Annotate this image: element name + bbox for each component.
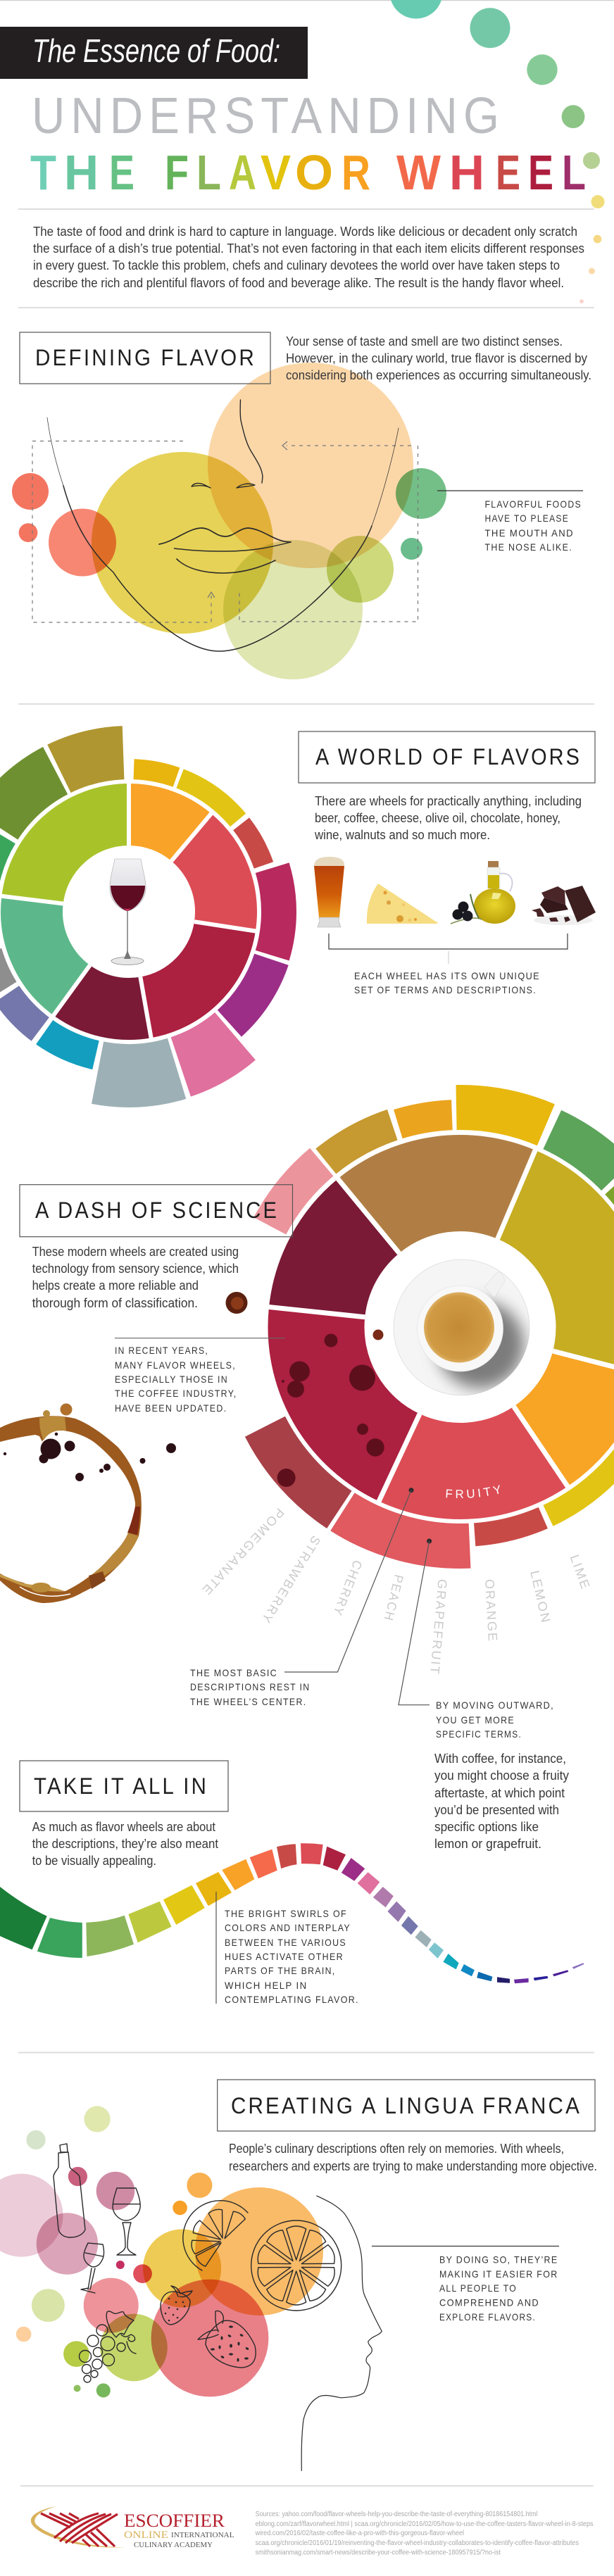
callout: bright swirls: BETWEEN THE VARIOUS [225,1937,346,1948]
callout line: center [284,1488,414,1672]
callout: bright swirls: HUES ACTIVATE OTHER [225,1951,344,1962]
logo name: ESCOFFIER [124,2511,225,2531]
callout: most basic: DESCRIPTIONS REST IN [190,1681,310,1692]
heading: take it all in: TAKE IT ALL IN [34,1773,208,1799]
sources [255,2511,594,2557]
text: wheels for anything: There are wheels for practically anything, including [315,794,582,808]
outer wheel labels: STRAWBERRY [258,1533,323,1626]
icon: beer [314,857,344,927]
callout: most basic: THE MOST BASIC [190,1667,277,1678]
text: modern wheels: These modern wheels are created using [32,1245,239,1259]
logo subtitle international: INTERNATIONAL [171,2531,234,2539]
callout: recent years: HAVE BEEN UPDATED. [115,1402,227,1414]
icon: chocolate [532,886,596,925]
outer wheel labels: CHERRY [330,1558,365,1619]
text: memories [229,2142,597,2173]
callout: flavorful foods: THE MOUTH AND [484,527,574,539]
callout: by doing so: ALL PEOPLE TO [439,2282,517,2294]
text: with coffee: specific options like [434,1820,539,1834]
callout: bright swirls: COLORS AND INTERPLAY [225,1922,351,1933]
logo subtitle online: ONLINE [124,2530,168,2541]
bracket connecting foods [329,934,568,964]
title: the flavor wheel: E [496,145,520,200]
intro text: in every guest. To tackle this problem, chefs and culinary devotees the world over have taken steps to [33,258,560,272]
icon: wine bottle [54,2144,85,2237]
heading: a world of flavors [299,731,595,783]
text: visually appealing: the descriptions, they’re also meant [32,1837,218,1851]
coffee flavor wheel [152,1019,614,1635]
heading: a dash of science: A DASH OF SCIENCE [35,1198,279,1223]
coffee splashes on wheel [277,1329,384,1487]
callout: moving outward: SPECIFIC TERMS. [436,1728,522,1740]
intro text: describe the rich and plentiful flavors of food and beverage alike. The result is the handy flavor wheel. [33,276,564,290]
logo emblem [31,2506,125,2547]
callout: bright swirls: PARTS OF THE BRAIN, [225,1965,335,1976]
text: with coffee: you might choose a fruity [434,1768,569,1783]
head profile [301,2196,382,2471]
outer wheel labels: POMEGRANATE [199,1505,287,1598]
text: modern wheels: helps create a more reliable and [32,1278,199,1293]
icon: orange slice [251,2220,342,2311]
title: the flavor wheel: T [30,145,56,200]
outer wheel labels: GRAPEFRUIT [427,1578,449,1676]
outer wheel labels: PEACH [381,1573,406,1623]
text: with coffee [434,1752,569,1851]
icon: wine glass large [113,2188,140,2255]
outer wheel labels: ORANGE [482,1578,500,1642]
callout: most basic [190,1667,310,1707]
callout: recent years: IN RECENT YEARS, [115,1345,208,1356]
icon: olive oil [451,861,515,924]
sources: wired.com/2016/02/taste-coffee-like-a-pro-with-this-gorgeous-flavor-wheel [255,2530,464,2537]
decorative dots trail [390,0,604,303]
text: with coffee: aftertaste, at which point [434,1786,565,1800]
callout: moving outward [436,1699,554,1740]
dashed flow arrows [32,441,418,622]
title: the flavor wheel: O [295,145,333,200]
title: the flavor wheel: E [109,145,134,200]
coffee drop by text [225,1292,248,1314]
callout: recent years: ESPECIALLY THOSE IN [115,1374,228,1385]
color wave ribbon [0,1843,584,1983]
title banner [0,27,308,79]
callout: bright swirls: CONTEMPLATING FLAVOR. [225,1994,359,2005]
panel: take it all in [0,1761,584,2005]
callout: each wheel [354,970,540,995]
coffee ring stain [0,1404,176,1603]
callout line: outward [399,1539,432,1705]
title: the flavor wheel: R [342,145,370,200]
heading: lingua franca: CREATING A LINGUA FRANCA [231,2093,582,2118]
logo subtitle academy: CULINARY ACADEMY [134,2541,213,2549]
heading: a dash of science [20,1185,293,1237]
text: modern wheels: technology from sensory science, which [32,1262,239,1276]
callout: each wheel: SET OF TERMS AND DESCRIPTIONS. [354,984,537,995]
sources: Sources: yahoo.com/food/flavor-wheels-help-you-describe-the-taste-of-everything-80186154801.html [256,2511,538,2518]
callout: moving outward: YOU GET MORE [436,1714,515,1726]
title: the flavor wheel: V [261,145,291,200]
text: modern wheels: thorough form of classification. [32,1296,198,1310]
intro text [33,225,584,290]
icon: cheese [367,884,438,924]
title: the flavor wheel: H [449,145,484,200]
text: with coffee: With coffee, for instance, [434,1752,566,1766]
text: wheels for anything: beer, coffee, cheese, olive oil, chocolate, honey, [315,811,560,825]
callout: most basic: THE WHEEL’S CENTER. [190,1696,307,1707]
callout: flavorful foods: FLAVORFUL FOODS [484,498,582,510]
coffee cup on saucer [394,1259,530,1395]
outer wheel labels: LEMON [527,1569,553,1625]
text: memories: People’s culinary descriptions often rely on memories. With wheels, [229,2142,564,2156]
sources: scaa.org/chronicle/2016/01/19/reinventing-the-flavor-wheel-industry-collaborates-to-identify-coffee-flavor-attributes [256,2539,579,2547]
title: the flavor wheel: E [528,145,553,200]
icon: small strawberry [161,2286,192,2325]
text: visually appealing: to be visually appealing. [32,1854,156,1868]
intro text: the surface of a dish’s true potential. That’s not even factoring in that each item elicits different responses [33,241,584,256]
overlapping memory circles [0,2106,323,2397]
heading: defining flavor: DEFINING FLAVOR [35,345,256,370]
text: senses: Your sense of taste and smell are two distinct senses. [286,334,563,348]
callout: flavorful foods [437,491,583,553]
text: wheels for anything: wine, walnuts and so much more. [314,828,490,842]
wheel label: fruity: FRUITY [446,1485,500,1498]
callout: recent years: THE COFFEE INDUSTRY, [115,1388,237,1399]
callout: bright swirls [225,1908,359,2005]
text: visually appealing [32,1820,218,1868]
overlapping flavor circles [12,363,446,679]
title: the flavor wheel: A [229,145,256,200]
callout: by doing so: BY DOING SO, THEY’RE [439,2254,558,2266]
panel: creating a lingua franca [0,2080,597,2471]
callout: by doing so: MAKING IT EASIER FOR [439,2268,558,2280]
callout: recent years [115,1338,285,1414]
text: visually appealing: As much as flavor wheels are about [32,1820,215,1834]
title: the flavor wheel: W [396,145,441,200]
panel: a world of flavors [0,681,596,1143]
panel: defining flavor [12,332,591,679]
text: with coffee: lemon or grapefruit. [434,1837,541,1851]
title: the flavor wheel: L [562,145,586,200]
callout: by doing so [372,2246,559,2323]
callout: bright swirls: THE BRIGHT SWIRLS OF [225,1908,347,1919]
panel: footer [31,2506,594,2557]
callout: by doing so: EXPLORE FLAVORS. [439,2311,536,2323]
outer wheel labels: LIME [568,1553,593,1592]
outer wheel labels [199,1505,593,1676]
text: senses [286,334,591,382]
callout: recent years: MANY FLAVOR WHEELS, [115,1359,236,1371]
callout: flavorful foods: THE NOSE ALIKE. [484,541,572,553]
heading: defining flavor [20,332,270,384]
logo: escoffier [31,2506,234,2549]
callout: flavorful foods: HAVE TO PLEASE [484,513,569,524]
text: with coffee: you’d be presented with [434,1803,559,1817]
title: the flavor wheel: L [196,145,221,200]
heading: lingua franca [218,2080,595,2131]
title: understanding: UNDERSTANDING [32,88,505,144]
icon: grapes [79,2311,136,2382]
sources: smithsonianmag.com/smart-news/describe-your-coffee-with-science-180957915/?no-ist [256,2549,501,2557]
intro text: The taste of food and drink is hard to capture in language. Words like delicious or decadent only scratch [33,225,577,239]
icon: large strawberry [198,2311,256,2368]
text: modern wheels [32,1245,239,1310]
callout: by doing so: COMPREHEND AND [439,2297,539,2308]
title: the flavor wheel: F [165,145,189,200]
text: senses: considering both experiences as occurring simultaneously. [286,368,591,382]
wine flavor wheel [0,681,360,1143]
text: wheels for anything [314,794,582,842]
callout: moving outward: BY MOVING OUTWARD, [436,1699,554,1711]
title banner: The Essence of Food: [32,32,280,69]
callout: each wheel: EACH WHEEL HAS ITS OWN UNIQUE [354,970,540,981]
heading: a world of flavors: A WORLD OF FLAVORS [315,744,582,769]
icon: wine glass small [81,2243,104,2293]
title: the flavor wheel: H [64,145,99,200]
heading: take it all in [20,1761,228,1811]
panel: header [0,0,604,303]
panel: a dash of science [0,1085,614,1851]
icon: wine glass [110,859,146,965]
callout: bright swirls: WHICH HELP IN [225,1980,307,1991]
text: senses: However, in the culinary world, true flavor is discerned by [286,351,587,365]
callout line: swirls [215,1892,217,2004]
face line drawing [47,400,399,651]
icon: orange wedge [183,2201,248,2270]
title: the flavor wheel [30,145,586,200]
